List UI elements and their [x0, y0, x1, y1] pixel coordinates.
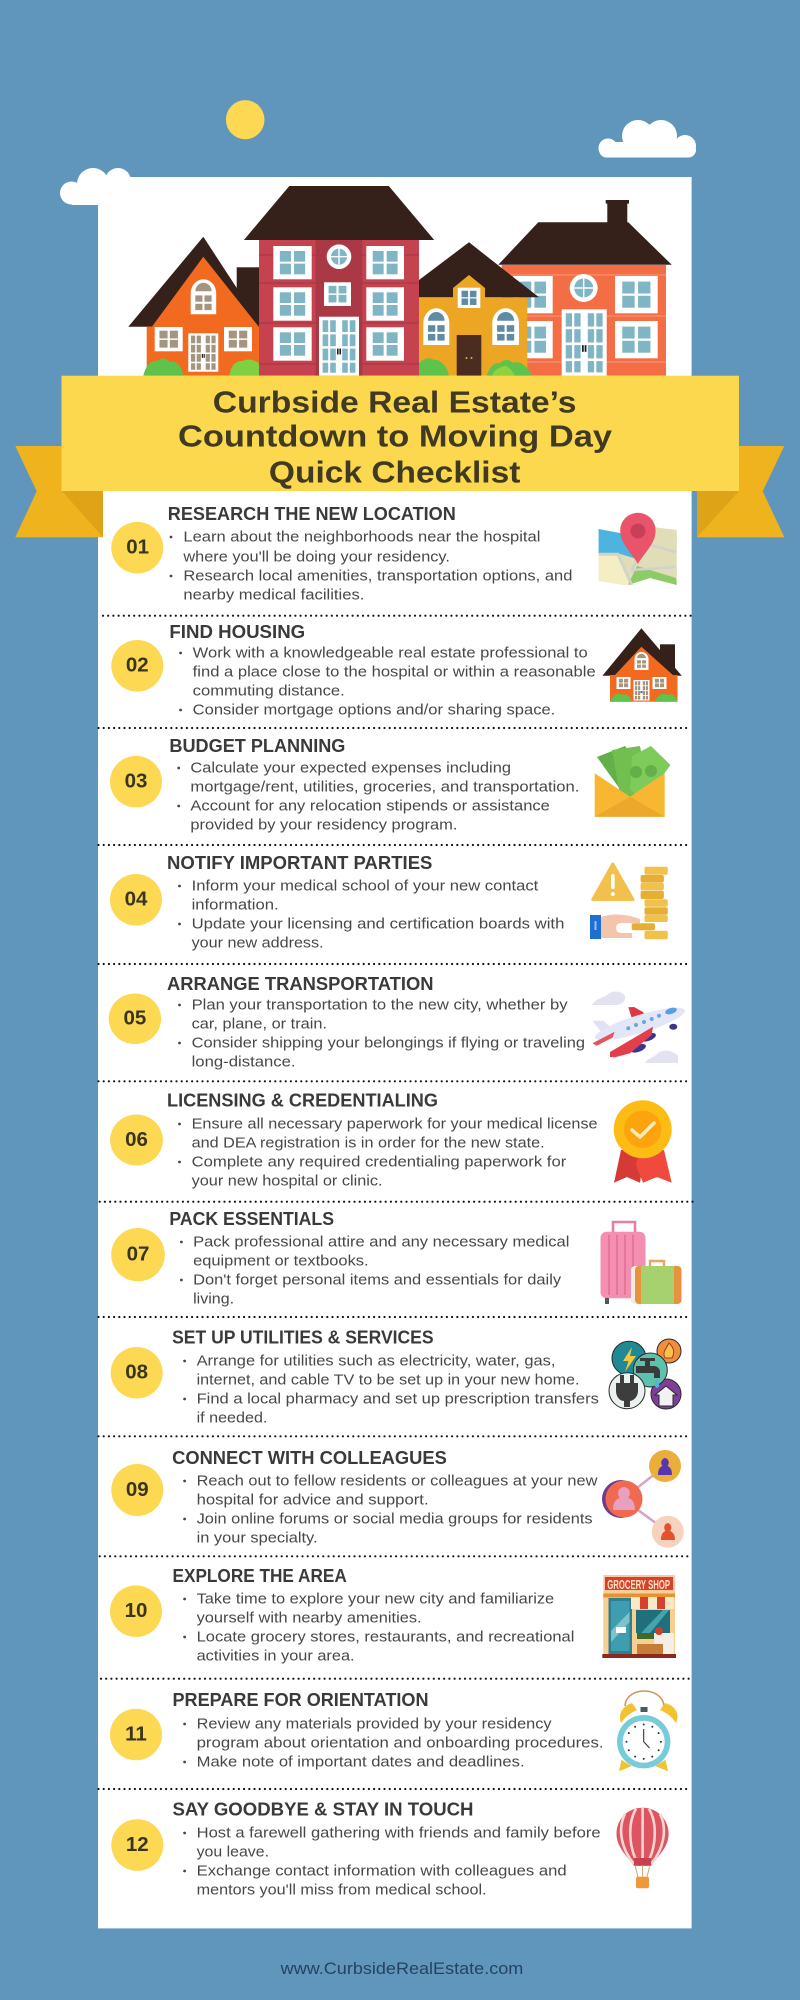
text block 08 — [183, 1353, 599, 1427]
text block 12: you leave. — [197, 1844, 269, 1861]
panel: step 06 — [110, 1091, 672, 1190]
number badge 01: 01 — [126, 536, 149, 558]
text block 07: Don't forget personal items and essentials for daily — [193, 1272, 562, 1289]
text block 09: hospital for advice and support. — [197, 1492, 429, 1509]
text block 03: mortgage/rent, utilities, groceries, and transportation. — [190, 779, 579, 796]
text block 03 — [177, 760, 579, 834]
title — [178, 384, 613, 489]
text block 08: if needed. — [197, 1410, 267, 1427]
panel: step 12 — [111, 1799, 669, 1899]
panel: step 02 — [111, 622, 682, 719]
number badge 06 — [110, 1114, 163, 1166]
number badge 10: 10 — [125, 1599, 147, 1622]
house: red townhouse — [244, 186, 434, 376]
text block 01: Research local amenities, transportation options, and — [183, 568, 572, 585]
text block 07: living. — [193, 1291, 234, 1308]
number badge 12 — [111, 1819, 163, 1871]
icon: money envelope — [595, 746, 670, 817]
number badge 01 — [111, 522, 163, 574]
text block 03: Account for any relocation stipends or assistance — [190, 798, 550, 815]
panel: step 04 — [110, 853, 668, 952]
number badge 08 — [111, 1347, 163, 1399]
divider — [103, 615, 693, 617]
text block 10 — [183, 1591, 574, 1665]
heading 12: SAY GOODBYE & STAY IN TOUCH — [172, 1799, 474, 1819]
heading 03: BUDGET PLANNING — [169, 736, 345, 756]
panel: step 10 — [110, 1566, 676, 1665]
text block 01 — [170, 529, 572, 604]
number badge 07 — [111, 1228, 165, 1281]
heading 05: ARRANGE TRANSPORTATION — [167, 974, 434, 994]
title: Countdown to Moving Day — [178, 419, 613, 454]
text block 05 — [178, 997, 585, 1071]
text block 08: Find a local pharmacy and set up prescription transfers — [197, 1391, 599, 1408]
text block 12 — [183, 1825, 601, 1899]
title banner — [62, 376, 739, 491]
text block 02: commuting distance. — [193, 683, 345, 700]
text block 03: Calculate your expected expenses including — [190, 760, 511, 777]
divider — [98, 1788, 690, 1790]
text block 09: in your specialty. — [197, 1530, 318, 1547]
illustration: row of houses — [128, 186, 672, 376]
text block 01: where you'll be doing your residency. — [182, 549, 450, 566]
divider — [98, 1316, 690, 1318]
number badge 06: 06 — [125, 1128, 148, 1151]
text block 07: equipment or textbooks. — [193, 1253, 369, 1270]
text block 04: Update your licensing and certification boards with — [192, 916, 564, 933]
number badge 08: 08 — [125, 1361, 148, 1384]
shop sign text: GROCERY SHOP — [607, 1578, 670, 1592]
text block 09: Reach out to fellow residents or colleagues at your new — [197, 1473, 598, 1490]
number badge 02: 02 — [126, 654, 149, 676]
text block 04: Inform your medical school of your new contact — [192, 878, 539, 895]
number badge 03: 03 — [125, 770, 147, 792]
text block 02: Work with a knowledgeable real estate professional to — [193, 645, 588, 662]
heading 02: FIND HOUSING — [169, 622, 305, 642]
panel: white checklist background — [98, 177, 692, 1928]
heading 07: PACK ESSENTIALS — [169, 1209, 334, 1229]
number badge 03 — [110, 756, 162, 808]
panel: step 09 — [111, 1448, 684, 1548]
number badge 10 — [110, 1585, 162, 1637]
number badge 02 — [111, 640, 163, 692]
number badge 07: 07 — [127, 1242, 149, 1266]
number badge 05 — [109, 994, 161, 1044]
text block 05: Plan your transportation to the new city, whether by — [192, 997, 568, 1014]
icon: map pin — [599, 513, 677, 585]
title: Curbside Real Estate’s — [213, 384, 577, 419]
panel: step 03 — [110, 736, 670, 834]
divider — [98, 963, 690, 965]
text block 05: Consider shipping your belongings if flying or traveling — [192, 1035, 585, 1052]
heading 06: LICENSING & CREDENTIALING — [167, 1091, 438, 1111]
panel: step 11 — [110, 1690, 678, 1771]
icon: utilities — [609, 1339, 681, 1409]
icon: right cloud — [598, 120, 696, 158]
panel: step 08 — [111, 1327, 681, 1427]
divider — [98, 727, 690, 729]
text block 05: long-distance. — [192, 1054, 296, 1071]
number badge 09 — [111, 1464, 163, 1516]
icon: colleague network — [602, 1450, 684, 1548]
text block 01: Learn about the neighborhoods near the hospital — [183, 529, 540, 546]
text block 02: Consider mortgage options and/or sharing space. — [193, 702, 555, 719]
text block 12: Host a farewell gathering with friends and family before — [197, 1825, 601, 1842]
text block 11: Make note of important dates and deadlines. — [197, 1754, 525, 1771]
ribbon: right tail — [697, 446, 784, 537]
panel: step 01 — [111, 504, 677, 604]
number badge 11 — [110, 1709, 162, 1760]
icon: award medal — [614, 1100, 672, 1183]
text block 07 — [180, 1234, 569, 1308]
number badge 11: 11 — [125, 1722, 147, 1745]
icon: left cloud — [60, 168, 131, 205]
number badge 04 — [110, 874, 162, 926]
icon: house — [602, 628, 682, 702]
text block 04 — [178, 878, 564, 952]
heading 10: EXPLORE THE AREA — [172, 1566, 347, 1586]
text block 06: Ensure all necessary paperwork for your medical license — [192, 1116, 598, 1133]
text block 02 — [179, 645, 596, 719]
divider — [98, 844, 690, 846]
divider — [100, 1555, 690, 1557]
heading 09: CONNECT WITH COLLEAGUES — [172, 1448, 447, 1468]
text block 08: Arrange for utilities such as electricity, water, gas, — [197, 1353, 555, 1370]
divider — [101, 1678, 693, 1680]
icon: grocery shop — [602, 1575, 676, 1658]
panel: step 07 — [111, 1209, 681, 1308]
heading 01: RESEARCH THE NEW LOCATION — [168, 504, 456, 524]
icon: luggage — [600, 1222, 682, 1304]
text block 01: nearby medical facilities. — [183, 587, 364, 604]
text block 12: mentors you'll miss from medical school. — [197, 1882, 487, 1899]
text block 09 — [183, 1473, 598, 1547]
icon: sun — [226, 100, 264, 139]
text block 09: Join online forums or social media groups for residents — [197, 1511, 593, 1528]
icon: alarm clock — [617, 1691, 678, 1770]
title: Quick Checklist — [269, 454, 520, 489]
text block 07: Pack professional attire and any necessary medical — [193, 1234, 569, 1251]
divider — [100, 1201, 693, 1203]
heading 08: SET UP UTILITIES & SERVICES — [172, 1327, 434, 1347]
house: yellow cottage — [419, 242, 539, 376]
icon: hot air balloon — [616, 1808, 669, 1888]
text block 04: information. — [192, 897, 279, 914]
text block 12: Exchange contact information with colleagues and — [197, 1863, 567, 1880]
text block 08: internet, and cable TV to be set up in your new home. — [197, 1372, 580, 1389]
icon: airplane — [592, 992, 688, 1063]
text block 02: find a place close to the hospital or within a reasonable — [193, 664, 596, 681]
heading 11: PREPARE FOR ORIENTATION — [172, 1690, 428, 1710]
house: coral brick — [498, 200, 672, 376]
text block 10: activities in your area. — [197, 1648, 355, 1665]
text block 06: and DEA registration is in order for the new state. — [192, 1135, 545, 1152]
text block 10: Take time to explore your new city and familiarize — [197, 1591, 554, 1608]
house: orange cottage — [128, 237, 262, 376]
number badge 05: 05 — [123, 1006, 146, 1030]
text block 10: yourself with nearby amenities. — [197, 1610, 422, 1627]
number badge 09: 09 — [126, 1478, 149, 1501]
number badge 04: 04 — [125, 888, 148, 911]
text block 06: your new hospital or clinic. — [192, 1173, 383, 1190]
heading 04: NOTIFY IMPORTANT PARTIES — [167, 853, 432, 873]
text block 03: provided by your residency program. — [190, 817, 457, 834]
text block 10: Locate grocery stores, restaurants, and recreational — [197, 1629, 574, 1646]
icon: warning sign and coins — [590, 864, 668, 939]
divider — [98, 1435, 690, 1437]
divider — [98, 1080, 690, 1082]
footer website: www.CurbsideRealEstate.com — [280, 1960, 523, 1978]
text block 11: Review any materials provided by your residency — [197, 1716, 552, 1733]
text block 05: car, plane, or train. — [192, 1016, 327, 1033]
panel: step 05 — [109, 974, 688, 1071]
text block 11 — [183, 1716, 604, 1771]
text block 06: Complete any required credentialing paperwork for — [192, 1154, 566, 1171]
number badge 12: 12 — [126, 1833, 149, 1856]
ribbon: left tail — [15, 446, 103, 537]
text block 04: your new address. — [192, 935, 324, 952]
text block 11: program about orientation and onboarding procedures. — [197, 1735, 604, 1752]
text block 06 — [178, 1116, 598, 1190]
